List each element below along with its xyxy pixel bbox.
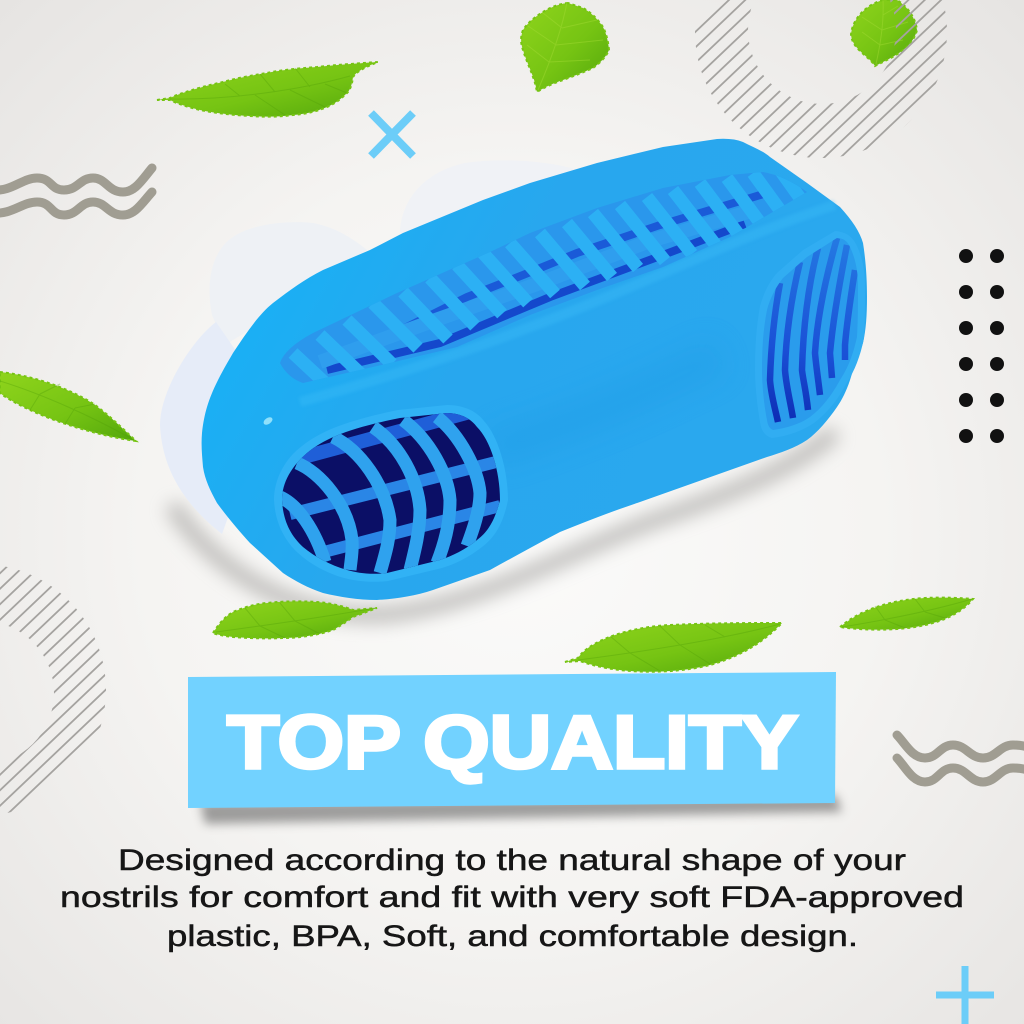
body glint <box>262 416 274 426</box>
product: anti-snoring nose device <box>160 139 867 615</box>
striped arc: left <box>0 566 106 813</box>
leaf: top long <box>157 62 378 117</box>
blue body <box>202 139 867 600</box>
leaf: under device centre <box>565 623 782 672</box>
white backing shell <box>160 322 270 534</box>
dot grid <box>959 249 1004 443</box>
grille dark holes <box>327 224 745 370</box>
icon: blue cross mark <box>371 113 413 156</box>
striped arc: top right <box>695 0 947 158</box>
side grille rim <box>755 231 865 438</box>
nose nub: right <box>400 160 578 245</box>
grille slats <box>288 172 804 380</box>
side grille <box>762 238 858 430</box>
leaf: left <box>0 372 136 441</box>
icon: blue plus mark <box>936 966 994 1024</box>
upper ridge highlight <box>300 205 835 402</box>
description text: plastic, BPA, Soft, and comfortable design. <box>167 920 858 953</box>
leaf: top right <box>851 0 917 66</box>
front grille rim <box>274 405 508 582</box>
front grille <box>282 413 500 574</box>
heading: TOP QUALITY <box>227 700 798 784</box>
wavy lines: top left <box>0 168 152 215</box>
banner: top quality <box>188 672 842 824</box>
wavy lines: right <box>897 735 1024 782</box>
top grille <box>280 172 806 383</box>
description text <box>60 844 964 953</box>
nose nub: left <box>210 222 367 345</box>
description text: Designed according to the natural shape of your <box>118 844 906 877</box>
body facet shading <box>490 355 720 450</box>
leaf: top centre <box>521 2 609 92</box>
leaf: under device left <box>213 601 377 638</box>
banner shadow <box>200 795 842 824</box>
device shadow <box>172 432 835 615</box>
description text: nostrils for comfort and fit with very soft FDA-approved <box>60 881 964 914</box>
grille cross bar <box>320 210 755 362</box>
banner box <box>188 672 836 808</box>
leaf: under device right <box>840 598 973 630</box>
